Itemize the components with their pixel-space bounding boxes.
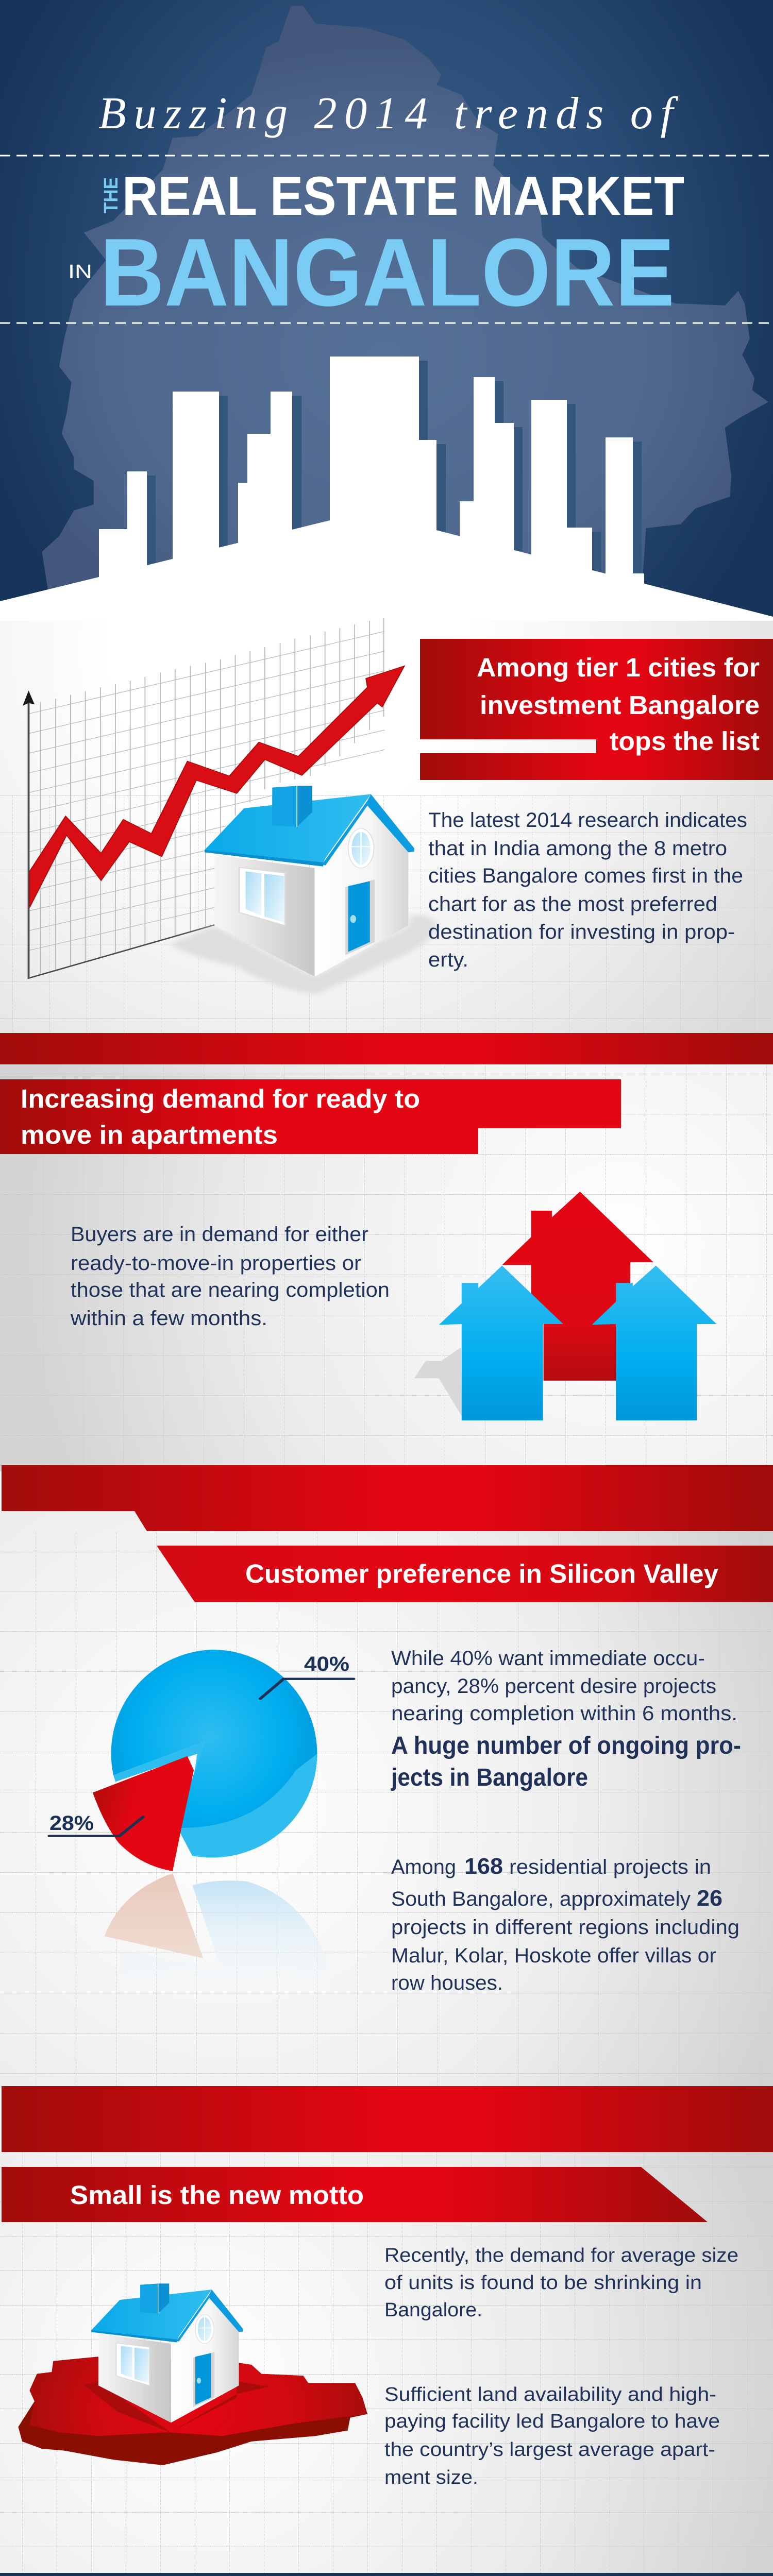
axes xyxy=(29,701,214,978)
body text: Sufficient land availability and high- xyxy=(384,2384,716,2405)
heading box xyxy=(0,1079,621,1154)
body text with numbers: 26 xyxy=(697,1886,722,1911)
subheading: ongoing projects: A huge number of ongoing pro- xyxy=(391,1732,741,1759)
map silhouette of Karnataka xyxy=(42,6,768,599)
heading box: Increasing demand for ready to xyxy=(21,1084,420,1113)
body text xyxy=(384,2245,738,2321)
body text: erty. xyxy=(428,948,468,971)
chart: pie xyxy=(49,1650,354,1991)
body text with numbers: projects in different regions including xyxy=(391,1916,740,1939)
title: real estate market: REAL ESTATE MARKET xyxy=(122,165,684,227)
background: light grid section 4 xyxy=(0,2152,773,2574)
body text: paying facility led Bangalore to have xyxy=(384,2411,720,2432)
body text xyxy=(428,809,747,971)
rising red arrow xyxy=(29,666,405,907)
heading box: Customer preference in Silicon Valley xyxy=(245,1559,719,1588)
white hill xyxy=(0,518,773,621)
dashed divider top xyxy=(0,155,773,157)
panel: ready to move in apartments xyxy=(0,1079,717,1420)
heading box: Among tier 1 cities for xyxy=(477,653,760,682)
title line: Buzzing 2014 trends of: Buzzing 2014 trends of xyxy=(98,89,679,139)
footer panel xyxy=(0,2573,773,2576)
chart: grid and rising arrow xyxy=(23,618,436,995)
pie reflection xyxy=(105,1873,328,1991)
leader 40 xyxy=(260,1679,354,1699)
red divider band xyxy=(2,2086,773,2152)
body text: Buyers are in demand for either xyxy=(71,1223,368,1246)
body text with numbers: residential projects in xyxy=(509,1856,711,1878)
panel: customer preference xyxy=(49,1546,773,1994)
heading box xyxy=(157,1546,773,1602)
body text xyxy=(384,2384,720,2488)
icon: small house xyxy=(91,2283,243,2422)
body text: of units is found to be shrinking in xyxy=(384,2272,702,2294)
heading box: investment Bangalore xyxy=(480,690,760,720)
icon: house-shaped arrows xyxy=(414,1192,717,1420)
subheading: ongoing projects: jects in Bangalore xyxy=(391,1764,588,1791)
body text with numbers: Among xyxy=(391,1856,456,1878)
body text: pancy, 28% percent desire projects xyxy=(391,1675,716,1698)
red slice xyxy=(93,1756,194,1871)
body text: Bangalore. xyxy=(384,2299,482,2321)
body text: nearing completion within 6 months. xyxy=(391,1702,737,1725)
heading box: Small is the new motto xyxy=(70,2180,364,2210)
header panel xyxy=(0,0,773,621)
red divider band with slanted cut xyxy=(2,1465,773,1531)
background: light grid section 1 xyxy=(0,567,773,1066)
leader 28 xyxy=(49,1817,143,1836)
body text with numbers: South Bangalore, approximately xyxy=(391,1888,691,1910)
body text: the country’s largest average apart- xyxy=(384,2439,715,2461)
dashed divider bottom xyxy=(0,323,773,324)
label: 40%: 40% xyxy=(304,1653,349,1675)
skyline buildings xyxy=(99,357,644,587)
title: the: THE xyxy=(100,177,122,213)
body text: Recently, the demand for average size xyxy=(384,2245,738,2266)
body text: those that are nearing completion xyxy=(71,1279,390,1301)
heading box xyxy=(2,2167,708,2222)
panel: investment tops the list xyxy=(23,618,773,995)
background: light grid section 2 xyxy=(0,1064,773,1471)
heading box: move in apartments xyxy=(21,1120,278,1149)
panel: small is the new motto xyxy=(2,2167,738,2488)
label: 28%: 28% xyxy=(49,1812,94,1835)
body text: within a few months. xyxy=(70,1307,267,1330)
red divider band xyxy=(0,1033,773,1064)
title: Bangalore: BANGALORE xyxy=(100,218,675,326)
house shadow xyxy=(170,915,436,995)
subheading: ongoing projects xyxy=(391,1732,741,1791)
body text with numbers xyxy=(391,1854,740,1994)
skyline shadows xyxy=(136,361,642,599)
title: in: IN xyxy=(68,261,92,283)
body text: cities Bangalore comes first in the xyxy=(428,865,743,887)
body text xyxy=(70,1223,390,1330)
background: light grid section 3 xyxy=(0,1511,773,2088)
body text: that in India among the 8 metro xyxy=(428,837,727,860)
icon: house xyxy=(205,786,414,976)
icon: red map under house xyxy=(18,2357,367,2465)
axis arrowhead xyxy=(23,690,35,706)
blue slice xyxy=(111,1650,317,1858)
heading box xyxy=(420,639,773,780)
body text: destination for investing in prop- xyxy=(428,921,735,943)
body text with numbers: Malur, Kolar, Hoskote offer villas or xyxy=(391,1944,716,1967)
body text: The latest 2014 research indicates xyxy=(428,809,747,832)
body text: While 40% want immediate occu- xyxy=(391,1647,705,1670)
body text: ment size. xyxy=(384,2467,478,2488)
body text with numbers: row houses. xyxy=(391,1972,503,1994)
heading box: tops the list xyxy=(610,726,760,756)
body text xyxy=(391,1647,737,1725)
body text with numbers: 168 xyxy=(464,1854,503,1879)
body text: ready-to-move-in properties or xyxy=(71,1252,361,1275)
body text: chart for as the most preferred xyxy=(428,893,717,916)
